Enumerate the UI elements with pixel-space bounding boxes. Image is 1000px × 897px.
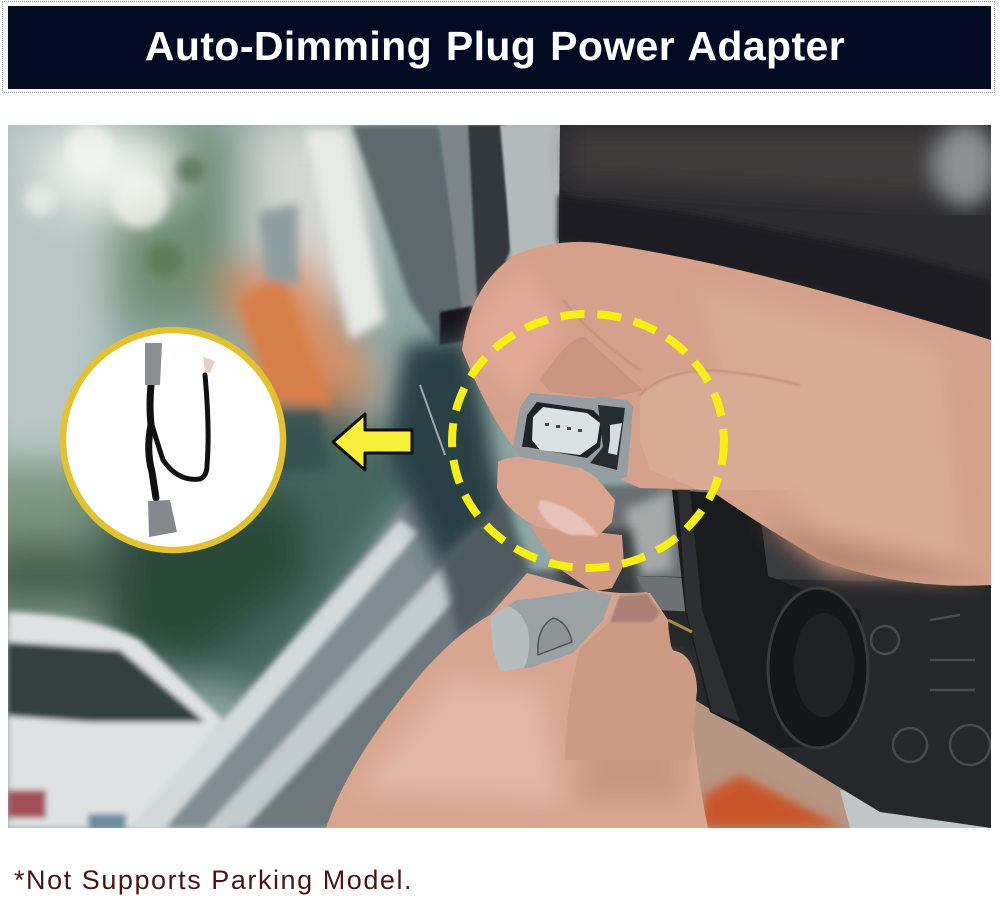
middle finger — [540, 337, 643, 398]
photo: hands connecting adapter plug behind rear-view mirror — [8, 125, 991, 828]
bottom connector — [148, 500, 177, 537]
thumbnail — [610, 594, 660, 622]
title — [8, 6, 991, 89]
socket connector — [513, 393, 633, 482]
title banner frame — [2, 1, 995, 93]
window pillar and trim — [128, 125, 600, 828]
background: windshield view — [8, 125, 850, 828]
dark headliner — [558, 125, 991, 340]
lower hand — [326, 573, 708, 828]
upper hand — [462, 242, 991, 592]
cable — [149, 375, 208, 498]
dashed highlight circle — [452, 314, 724, 568]
bottom finger — [530, 525, 624, 592]
white car outside — [8, 612, 228, 828]
mirror back area — [636, 490, 991, 828]
thumb of lower hand — [565, 592, 697, 760]
arrow pointing to inset — [333, 414, 412, 470]
title: Auto-Dimming Plug Power Adapter — [145, 23, 845, 69]
thumb — [640, 370, 773, 490]
inset circle: adapter cable — [63, 330, 283, 550]
area behind hands — [554, 482, 911, 593]
footnote: *Not Supports Parking Model. — [14, 865, 413, 895]
top connector — [145, 343, 162, 385]
index finger — [497, 457, 615, 537]
fingernail — [538, 500, 598, 535]
wire-to-board connector — [203, 357, 215, 373]
plug connector — [490, 590, 612, 672]
